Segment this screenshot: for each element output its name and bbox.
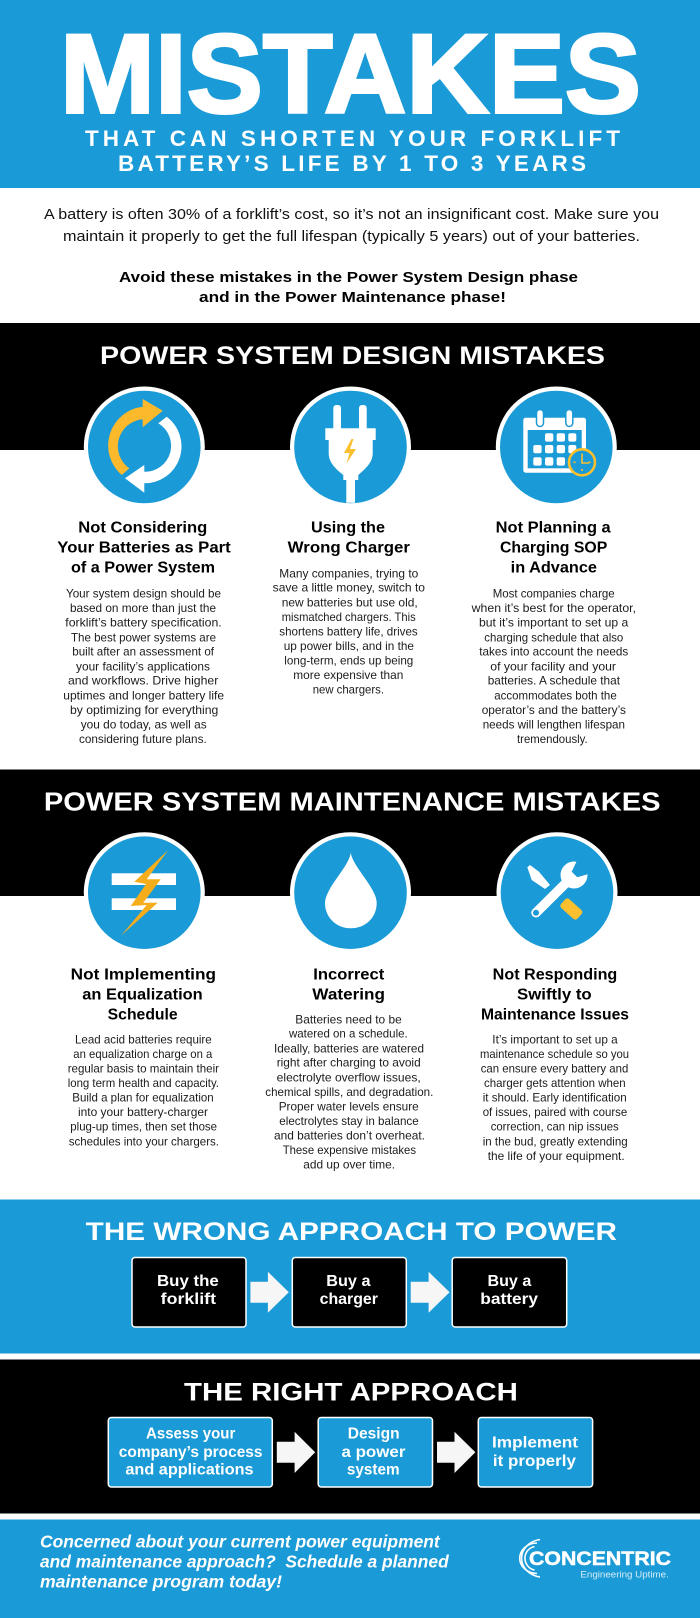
panel: the right approach: [0, 1360, 700, 1514]
body text: built after an assessment of: [72, 645, 215, 659]
logo: Concentric: CONCENTRIC: [529, 1548, 671, 1570]
heading: design mistakes: POWER SYSTEM DESIGN MISTAKES: [100, 342, 605, 370]
body text: of your facility and your: [490, 659, 616, 673]
body text: charger gets attention when: [484, 1076, 626, 1090]
heading: Schedule: [108, 1006, 178, 1023]
icon: water drop: [290, 832, 411, 953]
step: assess: Assess your: [146, 1426, 235, 1443]
step: assess: [108, 1418, 272, 1487]
body text: Your system design should be: [66, 586, 221, 600]
heading: Not Implementing: [71, 966, 216, 983]
body text: right after charging to avoid: [277, 1056, 421, 1070]
body text: [480, 1032, 629, 1163]
body text: more expensive than: [293, 668, 403, 682]
body text: Ideally, batteries are watered: [274, 1041, 424, 1055]
body text: new batteries but use old,: [282, 595, 418, 609]
body text: accommodates both the: [494, 688, 617, 702]
arrow: [437, 1432, 475, 1473]
step: design: system: [347, 1461, 400, 1478]
heading: of a Power System: [71, 560, 215, 577]
intro text: A battery is often 30% of a forklift’s cost, so it’s not an insignificant cost. Make sure you: [44, 206, 659, 223]
arrow: [250, 1272, 289, 1313]
body text: shortens battery life, drives: [279, 624, 418, 638]
body text: electrolyte overflow issues,: [277, 1070, 421, 1084]
body text: when it’s best for the operator,: [471, 601, 636, 615]
body text: needs will lengthen lifespan: [483, 718, 625, 732]
body text: into your battery-charger: [78, 1105, 208, 1119]
intro callout: and in the Power Maintenance phase!: [199, 289, 506, 306]
body text: regular basis to maintain their: [68, 1061, 219, 1075]
heading: THE RIGHT APPROACH: [184, 1379, 518, 1407]
heading: Charging SOP: [500, 540, 607, 557]
step: buy the forklift: Buy the: [157, 1273, 219, 1290]
step: buy a battery: [452, 1258, 567, 1327]
panel: wrong charger: [273, 386, 425, 697]
body text: of issues, paired with course: [483, 1105, 628, 1119]
body text: Lead acid batteries require: [75, 1032, 212, 1046]
panel: the wrong approach: [0, 1200, 700, 1354]
subtitle: BATTERY’S LIFE BY 1 TO 3 YEARS: [118, 151, 586, 176]
panel: equalization: [68, 832, 219, 1148]
heading: Not Responding: [493, 966, 617, 983]
body text: maintenance schedule so you: [480, 1047, 629, 1061]
body text: Build a plan for equalization: [72, 1091, 214, 1105]
body text: charging schedule that also: [484, 630, 624, 644]
body text: [63, 586, 224, 746]
body text: [265, 1012, 433, 1172]
body text: operator’s and the battery’s: [482, 703, 626, 717]
call to action text: [40, 1531, 449, 1591]
body text: long-term, ends up being: [284, 653, 413, 667]
body text: These expensive mistakes: [283, 1143, 416, 1157]
logo: Concentric: Engineering Uptime.: [580, 1569, 669, 1580]
heading: Using the: [311, 520, 385, 537]
body text: schedules into your chargers.: [69, 1134, 219, 1148]
body text: batteries. A schedule that: [488, 674, 621, 688]
step: assess: company’s process: [119, 1444, 262, 1461]
step: buy a battery: battery: [480, 1291, 538, 1308]
header banner: [0, 0, 700, 188]
body text: it should. Early identification: [483, 1091, 627, 1105]
icon: calendar and clock: [496, 386, 617, 508]
body text: considering future plans.: [79, 732, 207, 746]
intro text: [44, 206, 659, 245]
step: design: [318, 1418, 432, 1487]
step: design: Design: [348, 1426, 400, 1443]
body text: It’s important to set up a: [492, 1032, 618, 1046]
step: buy a battery: Buy a: [488, 1273, 532, 1290]
body text: Most companies charge: [493, 586, 615, 600]
arrow: [277, 1432, 315, 1473]
arrow: [411, 1272, 450, 1313]
heading: in Advance: [511, 560, 597, 577]
body text: up power bills, and in the: [284, 639, 414, 653]
body text: Many companies, trying to: [279, 566, 419, 580]
step: implement: Implement: [492, 1435, 578, 1452]
heading: an Equalization: [82, 986, 203, 1003]
body text: Proper water levels ensure: [279, 1099, 419, 1113]
step: assess: and applications: [125, 1461, 254, 1478]
heading: Swiftly to: [517, 986, 592, 1003]
step: design: a power: [342, 1444, 405, 1461]
body text: tremendously.: [517, 732, 588, 746]
step: implement: [478, 1418, 593, 1487]
heading: [496, 520, 611, 577]
panel: footer call to action: [0, 1520, 700, 1618]
subtitle: [85, 126, 620, 176]
call to action text: Concerned about your current power equipment: [40, 1531, 441, 1551]
body text: in the bud, greatly extending: [483, 1134, 628, 1148]
body text: new chargers.: [313, 683, 384, 697]
body text: correction, can nip issues: [491, 1120, 619, 1134]
body text: uptimes and longer battery life: [63, 688, 224, 702]
step: buy the forklift: [132, 1258, 246, 1327]
logo: Concentric: [520, 1540, 671, 1580]
heading: THE WRONG APPROACH TO POWER: [86, 1218, 617, 1246]
body text: an equalization charge on a: [73, 1047, 213, 1061]
body text: watered on a schedule.: [288, 1027, 408, 1041]
panel: maintenance issues: [480, 832, 629, 1163]
body text: and workflows. Drive higher: [68, 674, 218, 688]
heading: Not Planning a: [496, 520, 611, 537]
title: MISTAKES: [60, 12, 641, 136]
heading: Not Considering: [78, 520, 207, 537]
call to action text: and maintenance approach? Schedule a planned: [40, 1552, 449, 1572]
body text: Batteries need to be: [295, 1012, 402, 1026]
heading: Maintenance Issues: [481, 1006, 629, 1023]
body text: long term health and capacity.: [68, 1076, 219, 1090]
panel: charging SOP: [471, 386, 636, 746]
body text: [68, 1032, 219, 1148]
body text: but it’s important to set up a: [479, 616, 629, 630]
body text: [471, 586, 636, 746]
heading: [288, 520, 410, 557]
icon: cycle arrows: [84, 386, 205, 508]
body text: mismatched chargers. This: [282, 610, 416, 624]
call to action text: maintenance program today!: [40, 1571, 282, 1591]
body text: forklift’s battery specification.: [65, 616, 222, 630]
heading: [57, 520, 231, 577]
body text: you do today, as well as: [81, 718, 207, 732]
heading: Your Batteries as Part: [57, 540, 231, 557]
section band: maintenance mistakes: [0, 770, 700, 896]
body text: takes into account the needs: [479, 645, 628, 659]
icon: equals sign with lightning bolt: [84, 832, 205, 953]
intro callout: [119, 269, 578, 306]
step: buy a charger: [292, 1258, 406, 1327]
body text: can ensure every battery and: [481, 1061, 628, 1075]
section band: design mistakes: [0, 323, 700, 450]
panel: incorrect watering: [265, 832, 433, 1172]
body text: your facility’s applications: [76, 659, 210, 673]
body text: electrolytes stay in balance: [279, 1114, 419, 1128]
heading: maintenance mistakes: POWER SYSTEM MAINTENANCE MISTAKES: [44, 787, 661, 817]
intro callout: Avoid these mistakes in the Power System Design phase: [119, 269, 578, 286]
heading: Wrong Charger: [288, 540, 410, 557]
intro text: maintain it properly to get the full lifespan (typically 5 years) out of your batteries.: [63, 228, 640, 245]
step: implement: it properly: [493, 1453, 576, 1470]
heading: [481, 966, 629, 1023]
body text: [273, 566, 425, 697]
step: buy a charger: Buy a: [326, 1273, 371, 1290]
subtitle: THAT CAN SHORTEN YOUR FORKLIFT: [85, 126, 620, 151]
heading: [71, 966, 216, 1023]
body text: The best power systems are: [71, 630, 216, 644]
step: buy a charger: charger: [320, 1291, 378, 1308]
body text: the life of your equipment.: [488, 1149, 625, 1163]
heading: [312, 966, 385, 1003]
body text: chemical spills, and degradation.: [265, 1085, 433, 1099]
body text: save a little money, switch to: [273, 581, 425, 595]
heading: Watering: [312, 986, 385, 1003]
heading: Incorrect: [313, 966, 384, 983]
body text: by optimizing for everything: [70, 703, 218, 717]
panel: not considering batteries: [57, 386, 231, 746]
body text: based on more than just the: [70, 601, 216, 615]
icon: plug: [290, 386, 411, 508]
body text: and batteries don’t overheat.: [274, 1129, 425, 1143]
body text: plug-up times, then set those: [70, 1120, 217, 1134]
icon: wrench and screwdriver: [496, 832, 618, 953]
body text: add up over time.: [303, 1158, 395, 1172]
step: buy the forklift: forklift: [161, 1291, 216, 1308]
